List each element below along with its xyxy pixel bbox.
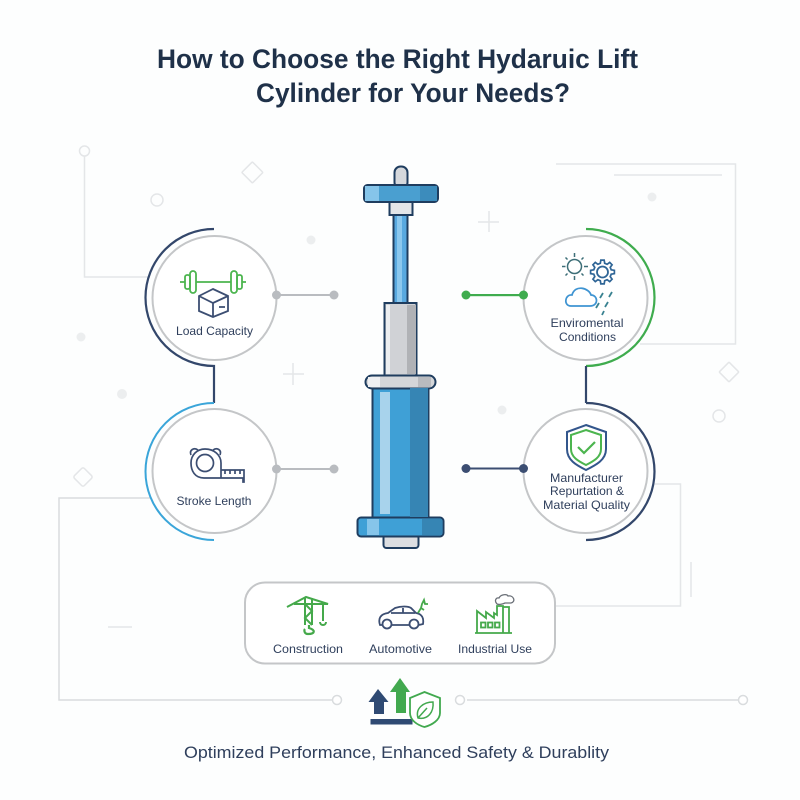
- panel: load capacity: [146, 229, 338, 403]
- panel: environmental conditions: [462, 229, 654, 403]
- connector: [462, 290, 528, 300]
- hydraulic cylinder illustration: [358, 166, 444, 548]
- panel: manufacturer reputation and material quality: Repurtation &: [550, 484, 624, 498]
- label: Enviromental: [550, 316, 624, 330]
- icon: factory: [475, 595, 514, 633]
- label: Construction: [273, 642, 343, 656]
- label: Manufacturer: [550, 471, 623, 485]
- icon: car: [379, 600, 428, 628]
- icon: performance arrows and leaf shield: [368, 678, 440, 727]
- panel: stroke length: [146, 403, 338, 540]
- panel: applications: [245, 582, 555, 664]
- panel: manufacturer reputation and material quality: [462, 403, 654, 540]
- icon: barbell and box: [180, 271, 246, 317]
- icon: shield with check: [567, 425, 606, 470]
- connector: [272, 464, 338, 474]
- title: [157, 44, 638, 108]
- connector: [272, 290, 338, 300]
- label: Automotive: [369, 642, 432, 656]
- title: How to Choose the Right Hydaruic Lift: [157, 44, 638, 74]
- footer statement: Optimized Performance, Enhanced Safety & Durablity: [184, 743, 610, 762]
- panel: manufacturer reputation and material quality: Material Quality: [543, 498, 630, 512]
- icon: weather and gear: [562, 253, 614, 315]
- connector: [462, 464, 528, 473]
- label: Load Capacity: [176, 324, 253, 338]
- title: Cylinder for Your Needs?: [256, 78, 570, 108]
- panel: environmental conditions: Conditions: [559, 330, 616, 344]
- label: Industrial Use: [458, 642, 532, 656]
- label: Stroke Length: [176, 494, 252, 508]
- icon: crane: [287, 597, 328, 634]
- icon: tape measure: [191, 449, 244, 482]
